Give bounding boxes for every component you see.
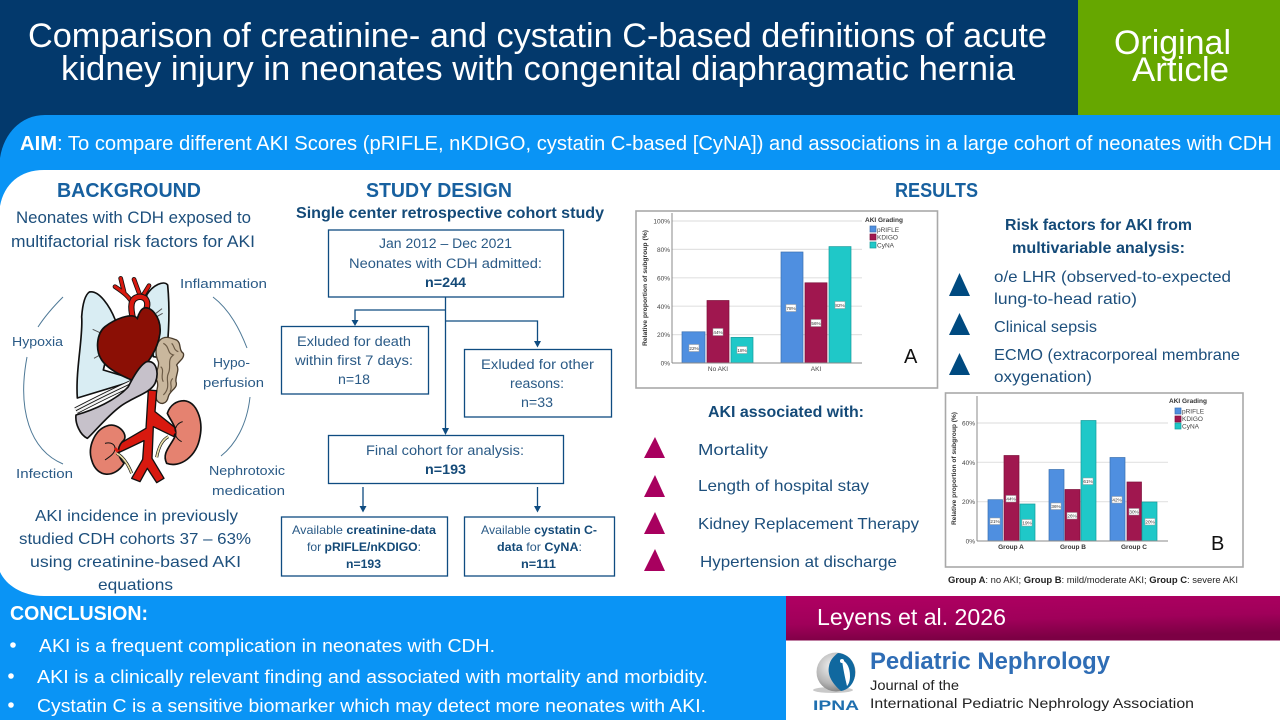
- bar chart A: 18%: [737, 348, 747, 353]
- risk factor labels: Infection: [16, 466, 73, 481]
- risk factor arcs: [24, 297, 250, 464]
- journal name: Journal of the: [870, 677, 959, 693]
- flow box: excluded other: [464, 350, 612, 417]
- flow arrows: [352, 297, 541, 512]
- bar chart B: pRIFLE: [1182, 408, 1205, 416]
- original article panel: Article: [1132, 51, 1229, 89]
- flow box: excluded death: Exluded for death: [297, 334, 411, 349]
- risk factor labels: [12, 276, 286, 498]
- flow box: admitted: n=244: [425, 275, 467, 290]
- background intro text: Neonates with CDH exposed to: [16, 209, 251, 227]
- panel: conclusion: [8, 603, 708, 716]
- heading: conclusion: CONCLUSION:: [10, 603, 148, 625]
- bar chart A: No AKI: [708, 366, 728, 373]
- list: AKI associations: Mortality: [698, 442, 768, 459]
- flow box: excluded death: within first 7 days:: [294, 353, 413, 368]
- bar chart B: 60%: [962, 420, 975, 428]
- flow box: admitted: Neonates with CDH admitted:: [349, 256, 542, 271]
- flow box: final cohort: [328, 436, 564, 484]
- bar chart A: [636, 211, 938, 388]
- risk factor labels: Nephrotoxic: [209, 463, 286, 478]
- bar chart A: A: [904, 346, 918, 368]
- header band: [0, 0, 1078, 170]
- flow box: creatinine data: n=193: [346, 557, 381, 571]
- flow box: admitted: [328, 230, 564, 297]
- flow box: creatinine data: Available creatinine-data: [292, 523, 436, 537]
- flow box: cystatin data: data for CyNA:: [497, 540, 582, 554]
- heading: AKI associated with: AKI associated with:: [708, 404, 864, 421]
- title: Comparison of creatinine- and cystatin C-based definitions of acute: [28, 17, 1047, 55]
- flow box: final cohort: n=193: [425, 462, 467, 477]
- white content panel: [0, 170, 1280, 596]
- bar chart A: CyNA: [877, 242, 895, 250]
- flow box: cystatin data: n=111: [521, 557, 556, 571]
- bar chart A: KDIGO: [877, 234, 898, 242]
- bar chart B: 44%: [1006, 496, 1016, 502]
- bar chart B: 20%: [962, 499, 975, 506]
- bar chart A: 40%: [657, 304, 670, 311]
- bar chart A: 78%: [786, 306, 796, 311]
- bar chart A: AKI: [811, 366, 821, 373]
- bar chart B: 20%: [1145, 520, 1155, 524]
- bar chart B: Relative proportion of subgroup (%): [951, 412, 958, 525]
- original article panel: Original: [1114, 24, 1231, 62]
- list: risk factors: [949, 269, 1240, 386]
- bar chart B: 30%: [1129, 510, 1139, 514]
- AKI incidence text: [19, 508, 251, 594]
- bar chart B: 61%: [1083, 479, 1093, 484]
- journal name: Pediatric Nephrology: [870, 648, 1111, 675]
- conclusion bullets: AKI is a clinically relevant finding and associated with mortality and morbidity.: [37, 667, 708, 687]
- bar chart B: Group C: [1121, 544, 1147, 551]
- bar chart B: B: [1211, 533, 1224, 555]
- bar chart B: 36%: [1051, 504, 1061, 509]
- aim band: AIM: To compare different AKI Scores (pRIFLE, nKDIGO, cystatin C-based [CyNA]) and associations in a large cohort of neonates with CDH: [20, 132, 1272, 155]
- flow box: creatinine data: for pRIFLE/nKDIGO:: [307, 540, 421, 554]
- heading: risk factors: Risk factors for AKI from: [1005, 217, 1192, 234]
- AKI incidence text: AKI incidence in previously: [35, 508, 238, 525]
- bar chart B: 42%: [1112, 498, 1122, 502]
- bar chart B: 21%: [990, 519, 1000, 524]
- title: [28, 17, 1047, 88]
- background intro text: multifactorial risk factors for AKI: [11, 233, 255, 251]
- risk factor labels: Hypoxia: [12, 334, 64, 349]
- illustration: heart, lungs, kidneys: [76, 278, 201, 483]
- heading: risk factors: multivariable analysis:: [1012, 240, 1185, 257]
- panel: journal and citation: [786, 596, 1280, 720]
- bar chart B: 19%: [1022, 520, 1032, 526]
- bar chart A: 0%: [661, 360, 670, 368]
- list: risk factors: oxygenation): [994, 369, 1092, 386]
- background intro text: [11, 209, 255, 251]
- bar chart A: 20%: [657, 332, 670, 339]
- panel: results: [636, 180, 1243, 585]
- list: risk factors: Clinical sepsis: [994, 319, 1097, 336]
- bar chart A: 100%: [653, 218, 670, 226]
- list: AKI associations: Hypertension at discharge: [700, 554, 897, 571]
- AKI incidence text: studied CDH cohorts 37 – 63%: [19, 531, 251, 548]
- bottom white edge: [0, 720, 1286, 726]
- conclusion bullets: [8, 636, 708, 716]
- citation banner: Leyens et al. 2026: [817, 604, 1006, 630]
- bar chart A: 82%: [835, 303, 845, 308]
- AKI incidence text: equations: [98, 577, 173, 594]
- bar chart A: pRIFLE: [877, 227, 900, 234]
- citation banner: [786, 596, 1280, 640]
- panel: study design: [282, 180, 614, 576]
- flow box: excluded death: [282, 326, 428, 394]
- list: AKI associations: Length of hospital stay: [698, 478, 869, 495]
- bar chart B: 0%: [966, 538, 975, 546]
- risk factor labels: Inflammation: [180, 276, 267, 291]
- risk factor labels: perfusion: [203, 375, 264, 390]
- flow box: excluded other: Exluded for other: [481, 357, 595, 372]
- bar chart B: AKI Grading: [1169, 398, 1207, 405]
- bar chart A: 80%: [657, 247, 670, 254]
- list: risk factors: o/e LHR (observed-to-expected: [994, 269, 1231, 286]
- flow box: cystatin data: [464, 517, 614, 576]
- flow box: excluded other: n=33: [521, 395, 553, 410]
- flow box: creatinine data: [282, 517, 448, 576]
- flow box: admitted: Jan 2012 – Dec 2021: [379, 236, 512, 251]
- heading: study design: STUDY DESIGN: [366, 180, 512, 202]
- bar chart B: Group A: [998, 544, 1024, 551]
- heading: risk factors: [1005, 217, 1192, 257]
- conclusion bullets: Cystatin C is a sensitive biomarker which may detect more neonates with AKI.: [37, 696, 706, 716]
- flow box: final cohort: Final cohort for analysis:: [366, 443, 524, 458]
- icon: IPNA logo: [813, 652, 859, 713]
- flow box: cystatin data: Available cystatin C-: [481, 523, 597, 537]
- title: kidney injury in neonates with congenital diaphragmatic hernia: [61, 50, 1015, 88]
- bar chart A: Relative proportion of subgroup (%): [642, 230, 649, 346]
- panel: background: [11, 180, 286, 594]
- bar chart B: Group B: [1060, 544, 1086, 551]
- heading: background: BACKGROUND: [57, 180, 201, 202]
- chart B caption: Group A: no AKI; Group B: mild/moderate AKI; Group C: severe AKI: [948, 575, 1238, 585]
- icon: IPNA logo: IPNA: [813, 697, 859, 713]
- list: risk factors: lung-to-head ratio): [994, 291, 1137, 308]
- bar chart B: KDIGO: [1182, 416, 1203, 423]
- bar chart A: AKI Grading: [865, 217, 903, 224]
- bar chart B: 40%: [962, 460, 975, 467]
- list: AKI associations: [644, 437, 919, 571]
- study type subheading: Single center retrospective cohort study: [296, 205, 604, 222]
- heading: results: RESULTS: [895, 180, 978, 202]
- right white edge: [1280, 0, 1286, 726]
- bar chart A: 60%: [657, 276, 670, 282]
- bar chart A: 56%: [811, 321, 821, 326]
- bar chart B: CyNA: [1182, 424, 1200, 430]
- risk factor labels: Hypo-: [213, 355, 250, 370]
- original article panel: [1078, 0, 1280, 116]
- AKI incidence text: using creatinine-based AKI: [30, 554, 241, 571]
- bar chart A: 22%: [689, 346, 699, 351]
- journal name: International Pediatric Nephrology Association: [870, 695, 1194, 711]
- journal name: [870, 648, 1194, 711]
- flow box: excluded other: reasons:: [510, 376, 564, 391]
- list: risk factors: ECMO (extracorporeal membrane: [994, 347, 1240, 364]
- risk factor labels: medication: [212, 483, 285, 498]
- bar chart A: 44%: [713, 330, 723, 335]
- bar chart B: [946, 393, 1243, 567]
- bar chart B: 26%: [1067, 514, 1077, 518]
- list: AKI associations: Kidney Replacement Therapy: [698, 516, 919, 533]
- conclusion bullets: AKI is a frequent complication in neonates with CDH.: [39, 636, 495, 656]
- flow box: excluded death: n=18: [338, 372, 370, 387]
